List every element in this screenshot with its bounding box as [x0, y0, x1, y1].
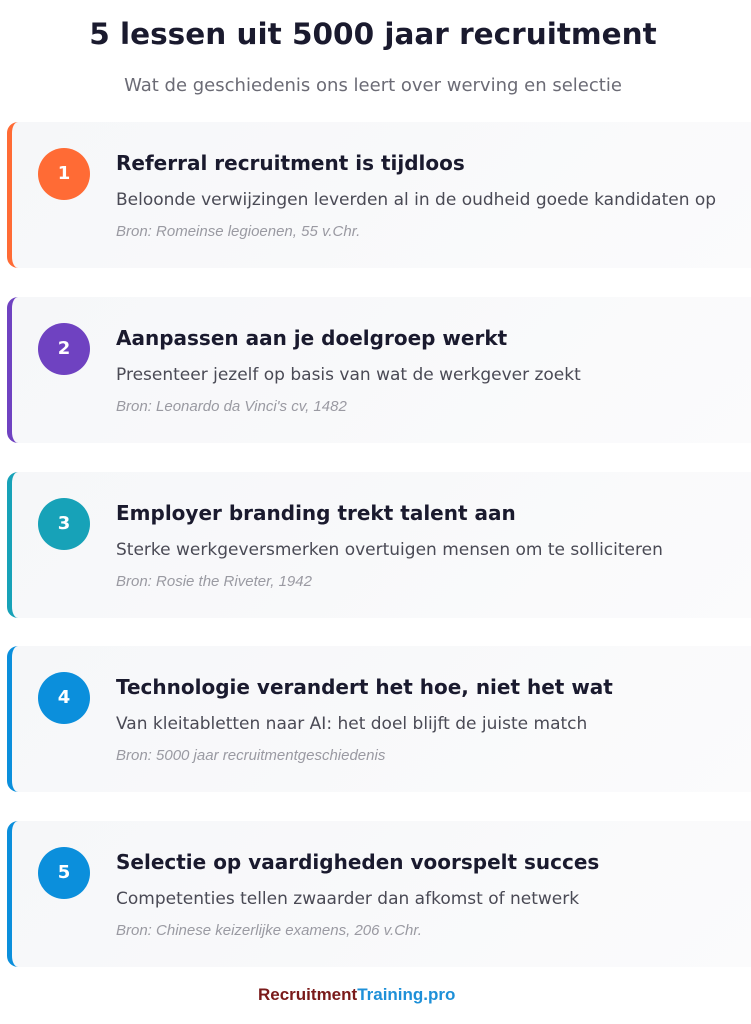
- icon: number 4: 4: [58, 687, 70, 708]
- text 2: Presenteer jezelf op basis van wat de werkgever zoekt: [116, 365, 581, 385]
- text 4: Van kleitabletten naar AI: het doel blijft de juiste match: [116, 714, 587, 734]
- panel: lesson 3: [7, 472, 751, 618]
- panel: lesson 2: [7, 297, 751, 443]
- source 4: Bron: 5000 jaar recruitmentgeschiedenis: [116, 747, 385, 764]
- icon: number 1: [38, 148, 90, 200]
- subtitle: Wat de geschiedenis ons leert over werving en selectie: [124, 75, 622, 96]
- icon: number 1: 1: [58, 163, 70, 184]
- source 3: Bron: Rosie the Riveter, 1942: [116, 573, 312, 590]
- text 3: Sterke werkgeversmerken overtuigen mensen om te solliciteren: [116, 540, 663, 560]
- heading 3: Employer branding trekt talent aan: [116, 501, 516, 525]
- text 5: Competenties tellen zwaarder dan afkomst of netwerk: [116, 889, 579, 909]
- icon: number 2: 2: [58, 338, 70, 359]
- heading 4: Technologie verandert het hoe, niet het wat: [116, 675, 613, 699]
- icon: number 3: 3: [58, 513, 70, 534]
- panel: lesson 1: [7, 122, 751, 268]
- panel: lesson 5: [7, 821, 751, 967]
- icon: number 5: [38, 847, 90, 899]
- heading 1: Referral recruitment is tijdloos: [116, 151, 465, 175]
- icon: number 4: [38, 672, 90, 724]
- heading 5: Selectie op vaardigheden voorspelt succes: [116, 850, 599, 874]
- icon: number 3: [38, 498, 90, 550]
- heading 2: Aanpassen aan je doelgroep werkt: [116, 326, 507, 350]
- source 5: Bron: Chinese keizerlijke examens, 206 v.Chr.: [116, 922, 422, 939]
- title: 5 lessen uit 5000 jaar recruitment: [89, 17, 657, 51]
- source 2: Bron: Leonardo da Vinci's cv, 1482: [116, 398, 347, 415]
- source 1: Bron: Romeinse legioenen, 55 v.Chr.: [116, 223, 360, 240]
- panel: lesson 4: [7, 646, 751, 792]
- text 1: Beloonde verwijzingen leverden al in de oudheid goede kandidaten op: [116, 190, 716, 210]
- logo: RecruitmentTraining.pro: [258, 985, 455, 1004]
- icon: number 2: [38, 323, 90, 375]
- icon: number 5: 5: [58, 862, 70, 883]
